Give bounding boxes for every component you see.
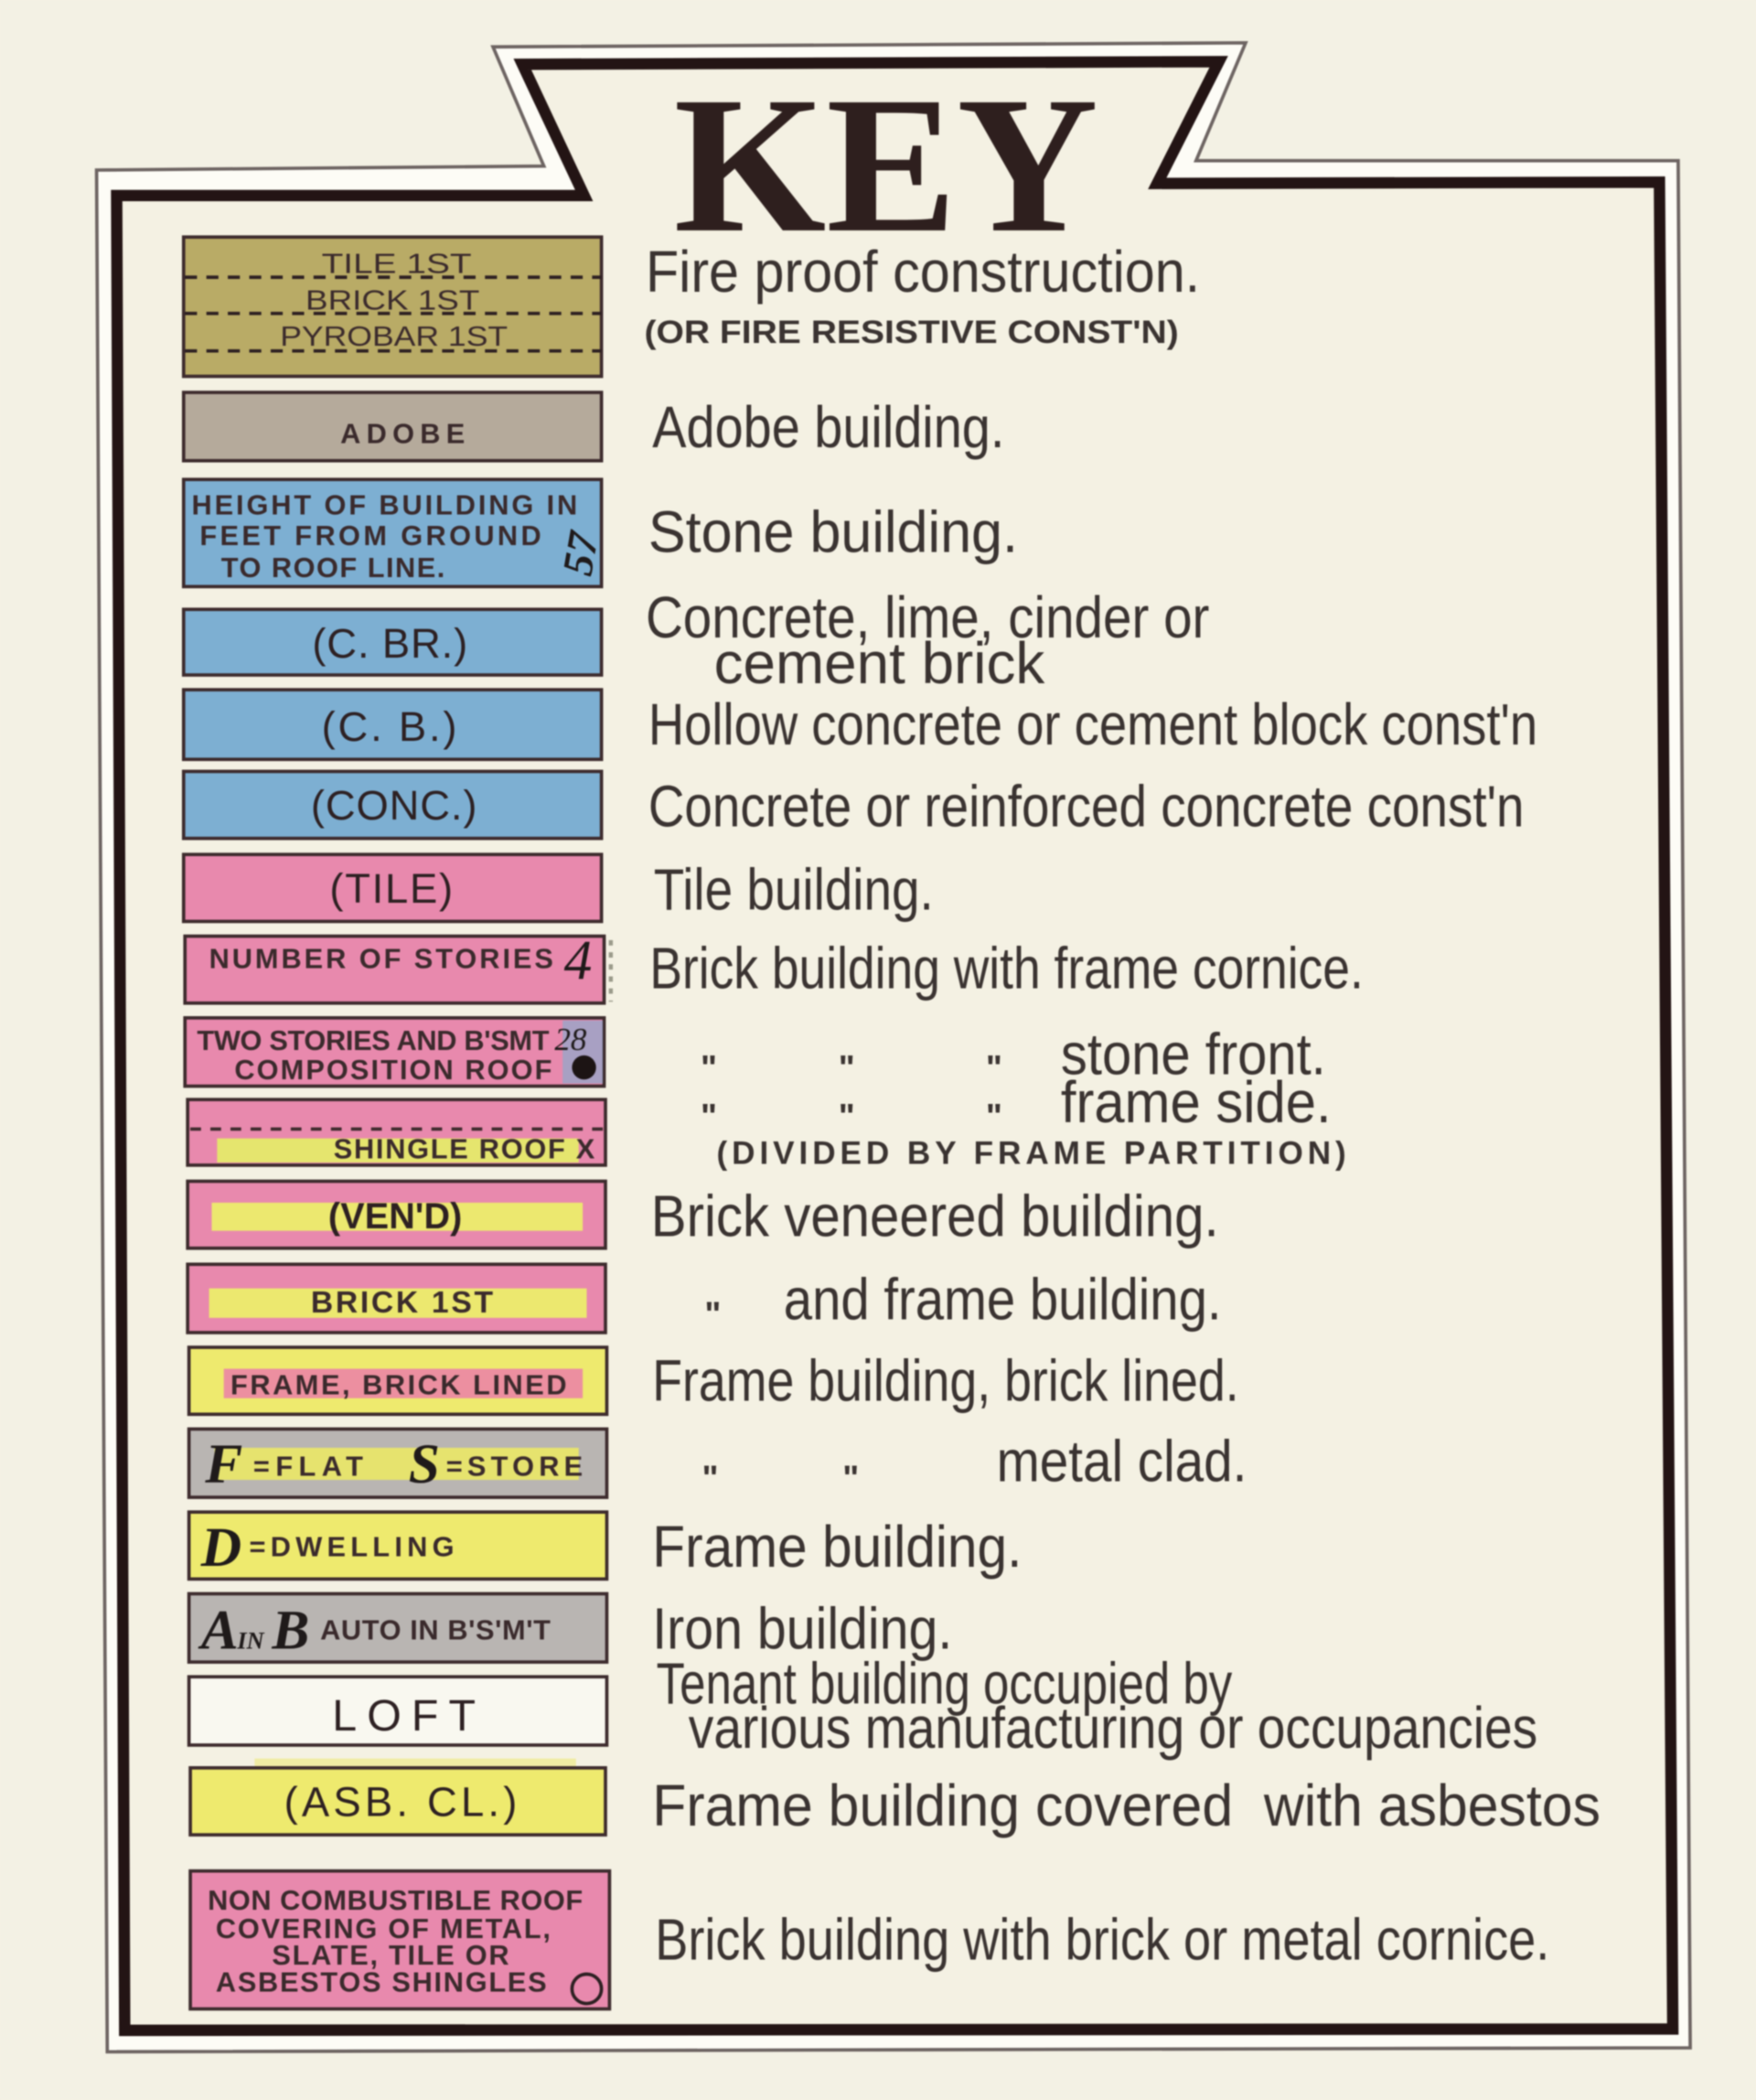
swatch: two stories and basement: TWO STORIES AND B'SMT <box>197 1024 550 1056</box>
description: metal clad: " <box>842 1459 859 1497</box>
description: fire proof: (OR FIRE RESISTIVE CONST'N) <box>644 315 1179 350</box>
swatch: non combustible roof: COVERING OF METAL, <box>216 1912 551 1945</box>
description: frame: Frame building. <box>652 1514 1022 1580</box>
swatch: number of stories <box>185 929 611 1003</box>
description: stone front: " <box>701 1049 717 1088</box>
swatch: flat and store: =STORE <box>446 1451 583 1483</box>
swatch: flat and store: S <box>409 1433 440 1495</box>
swatch: cement block: (C. B.) <box>322 703 456 750</box>
description: frame side: " <box>701 1098 717 1136</box>
swatch: frame brick lined <box>189 1347 606 1414</box>
swatch: shingle roof <box>187 1099 605 1165</box>
swatch: adobe <box>184 392 602 461</box>
swatch: stone: TO ROOF LINE. <box>221 552 444 584</box>
swatch: auto in basement: B <box>271 1600 309 1662</box>
swatch: stone <box>184 479 608 586</box>
description: metal clad: metal clad. <box>997 1429 1247 1495</box>
description: iron: Iron building. <box>652 1596 952 1662</box>
description: adobe: Adobe building. <box>652 394 1004 460</box>
swatch: two stories and basement: COMPOSITION ROOF <box>234 1054 551 1086</box>
description: stone: Stone building. <box>648 498 1018 564</box>
swatch: flat and store: =FLAT <box>253 1451 363 1483</box>
swatch: adobe: ADOBE <box>340 418 465 450</box>
swatch: cement block <box>184 690 602 759</box>
title: KEY <box>674 57 1098 273</box>
description: brick veneered: Brick veneered building. <box>651 1184 1219 1249</box>
description: frame side: frame side. <box>1061 1069 1332 1135</box>
swatch: non combustible roof: NON COMBUSTIBLE ROOF <box>208 1884 583 1916</box>
description: stone front <box>701 1021 1326 1088</box>
description: frame side: " <box>986 1098 1002 1136</box>
swatch: loft: LOFT <box>332 1691 476 1741</box>
swatch: fire proof <box>184 237 602 376</box>
swatch: brick veneered: (VEN'D) <box>328 1196 462 1237</box>
swatch: shingle roof: SHINGLE ROOF X <box>334 1133 595 1165</box>
swatch: stone: FEET FROM GROUND <box>199 520 541 552</box>
description: concrete brick: Concrete, lime, cinder or <box>646 584 1209 650</box>
description: fire proof <box>644 239 1200 350</box>
swatch: brick first: BRICK 1ST <box>311 1286 493 1320</box>
swatch: frame brick lined: FRAME, BRICK LINED <box>230 1368 567 1400</box>
description: brick with brick or metal cornice: Brick building with brick or metal cornice. <box>655 1906 1549 1972</box>
swatch: dwelling <box>189 1512 606 1579</box>
swatch: reinforced concrete <box>184 771 602 839</box>
description: brick and frame: and frame building. <box>784 1266 1222 1332</box>
description: tenant building: Tenant building occupied by <box>657 1651 1233 1717</box>
description: concrete brick: cement brick <box>714 630 1045 696</box>
swatch: concrete brick: (C. BR.) <box>312 620 467 667</box>
swatch: auto in basement: AUTO IN B'S'M'T <box>320 1613 551 1645</box>
swatch: auto in basement <box>189 1593 606 1662</box>
swatch: fire proof: BRICK 1ST <box>305 284 480 316</box>
swatch: tile: (TILE) <box>329 865 453 912</box>
swatch: loft <box>189 1677 606 1745</box>
swatch: brick first <box>187 1264 605 1333</box>
description: tile: Tile building. <box>654 856 934 922</box>
description: stone front: " <box>986 1049 1002 1088</box>
swatch: tile <box>184 854 602 921</box>
description: reinforced concrete: Concrete or reinforced concrete const'n <box>648 773 1525 839</box>
swatch: non combustible roof: ASBESTOS SHINGLES <box>216 1966 547 1998</box>
swatch: non combustible roof <box>190 1871 609 2009</box>
swatch: reinforced concrete: (CONC.) <box>311 782 476 829</box>
swatch: flat and store: F <box>204 1433 242 1495</box>
swatch: two stories and basement: 28 <box>554 1022 587 1057</box>
swatch: dwelling: =DWELLING <box>250 1531 455 1563</box>
swatch: auto in basement: IN <box>236 1628 265 1655</box>
swatch: brick veneered <box>187 1182 605 1248</box>
description: stone front: " <box>839 1049 855 1088</box>
swatch: asbestos clad <box>190 1759 605 1835</box>
description: tenant building: various manufacturing or occupancies <box>689 1695 1537 1761</box>
description: metal clad: " <box>701 1459 718 1497</box>
description: cement block: Hollow concrete or cement block const'n <box>648 691 1537 757</box>
description: fire proof: Fire proof construction. <box>646 239 1200 305</box>
swatch: auto in basement: A <box>198 1600 239 1662</box>
swatch: stone: HEIGHT OF BUILDING IN <box>192 488 577 520</box>
description: metal clad <box>701 1429 1247 1497</box>
description: frame brick lined: Frame building, brick lined. <box>652 1348 1239 1414</box>
swatch: fire proof: PYROBAR 1ST <box>280 320 508 352</box>
swatch: number of stories: 4 <box>564 929 592 991</box>
swatch: fire proof: TILE 1ST <box>322 248 472 280</box>
swatch: asbestos clad: (ASB. CL.) <box>284 1779 517 1826</box>
swatch: stone: 57 <box>554 527 608 579</box>
description: frame side: " <box>839 1098 855 1136</box>
swatch: concrete brick <box>184 609 602 675</box>
swatch: two stories and basement <box>185 1018 605 1087</box>
swatch: non combustible roof: SLATE, TILE OR <box>272 1939 509 1971</box>
description: concrete brick <box>646 584 1209 696</box>
description: tenant building <box>657 1651 1537 1761</box>
description: frame side <box>701 1069 1346 1171</box>
description: asbestos: Frame building covered with asbestos <box>652 1773 1601 1838</box>
swatch: dwelling: D <box>200 1516 241 1579</box>
description: stone front: stone front. <box>1061 1021 1326 1087</box>
swatch: flat and store <box>189 1429 606 1497</box>
description: brick with frame cornice: Brick building with frame cornice. <box>649 936 1364 1002</box>
description: brick and frame: " <box>704 1296 721 1334</box>
description: frame side: (DIVIDED BY FRAME PARTITION) <box>717 1135 1346 1171</box>
swatch: number of stories: NUMBER OF STORIES <box>209 943 553 975</box>
